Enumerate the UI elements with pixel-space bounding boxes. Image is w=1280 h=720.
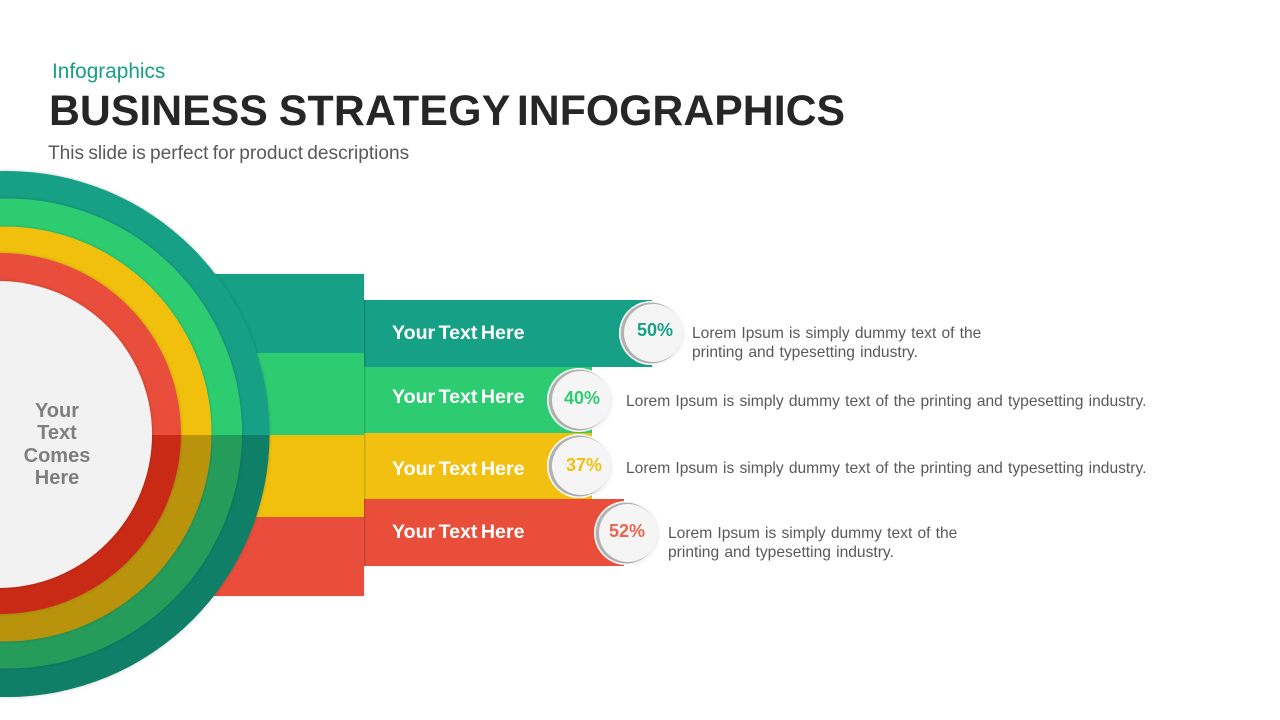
badge: 50% [619,301,683,365]
tagline: This slide is perfect for product descriptions [48,143,409,164]
description 4: printing and typesetting industry. [668,544,894,561]
description 4: Lorem Ipsum is simply dummy text of the [668,525,957,542]
bar label 3: Your Text Here [392,458,524,480]
center text: Here [35,467,79,489]
description 3: Lorem Ipsum is simply dummy text of the printing and typesetting industry. [626,460,1146,477]
percent badges [547,301,683,565]
title: BUSINESS STRATEGY INFOGRAPHICS [49,87,845,135]
bar label 2: Your Text Here [392,386,524,408]
center text: Comes [24,444,90,466]
percent 37: 37% [566,455,602,475]
description 1: Lorem Ipsum is simply dummy text of the [692,325,981,342]
center text: Text [37,422,77,444]
bar label 1: Your Text Here [392,322,524,344]
percent 40: 40% [564,388,600,408]
badge: 52% [594,501,658,565]
bar: yellow [364,433,592,499]
bar label 4: Your Text Here [392,521,524,543]
description 4 [668,525,957,561]
percent 50: 50% [637,320,673,340]
description 1: printing and typesetting industry. [692,344,918,361]
percent 52: 52% [609,521,645,541]
bar: green [364,367,592,433]
center text: Your [35,400,79,422]
graphic: concentric rings and bars [0,170,684,698]
bar: teal [364,300,652,367]
concentric rings [0,171,270,697]
badge: 40% [547,368,611,432]
badge: 37% [547,434,611,498]
description 1 [692,325,981,361]
ribbon bars [364,300,652,566]
lower half shade [0,435,270,697]
bar: red [364,499,624,566]
center text [24,400,90,489]
back panel stripes [200,274,364,596]
description 2: Lorem Ipsum is simply dummy text of the printing and typesetting industry. [626,393,1146,410]
subtitle: Infographics: Infographics [52,60,165,83]
